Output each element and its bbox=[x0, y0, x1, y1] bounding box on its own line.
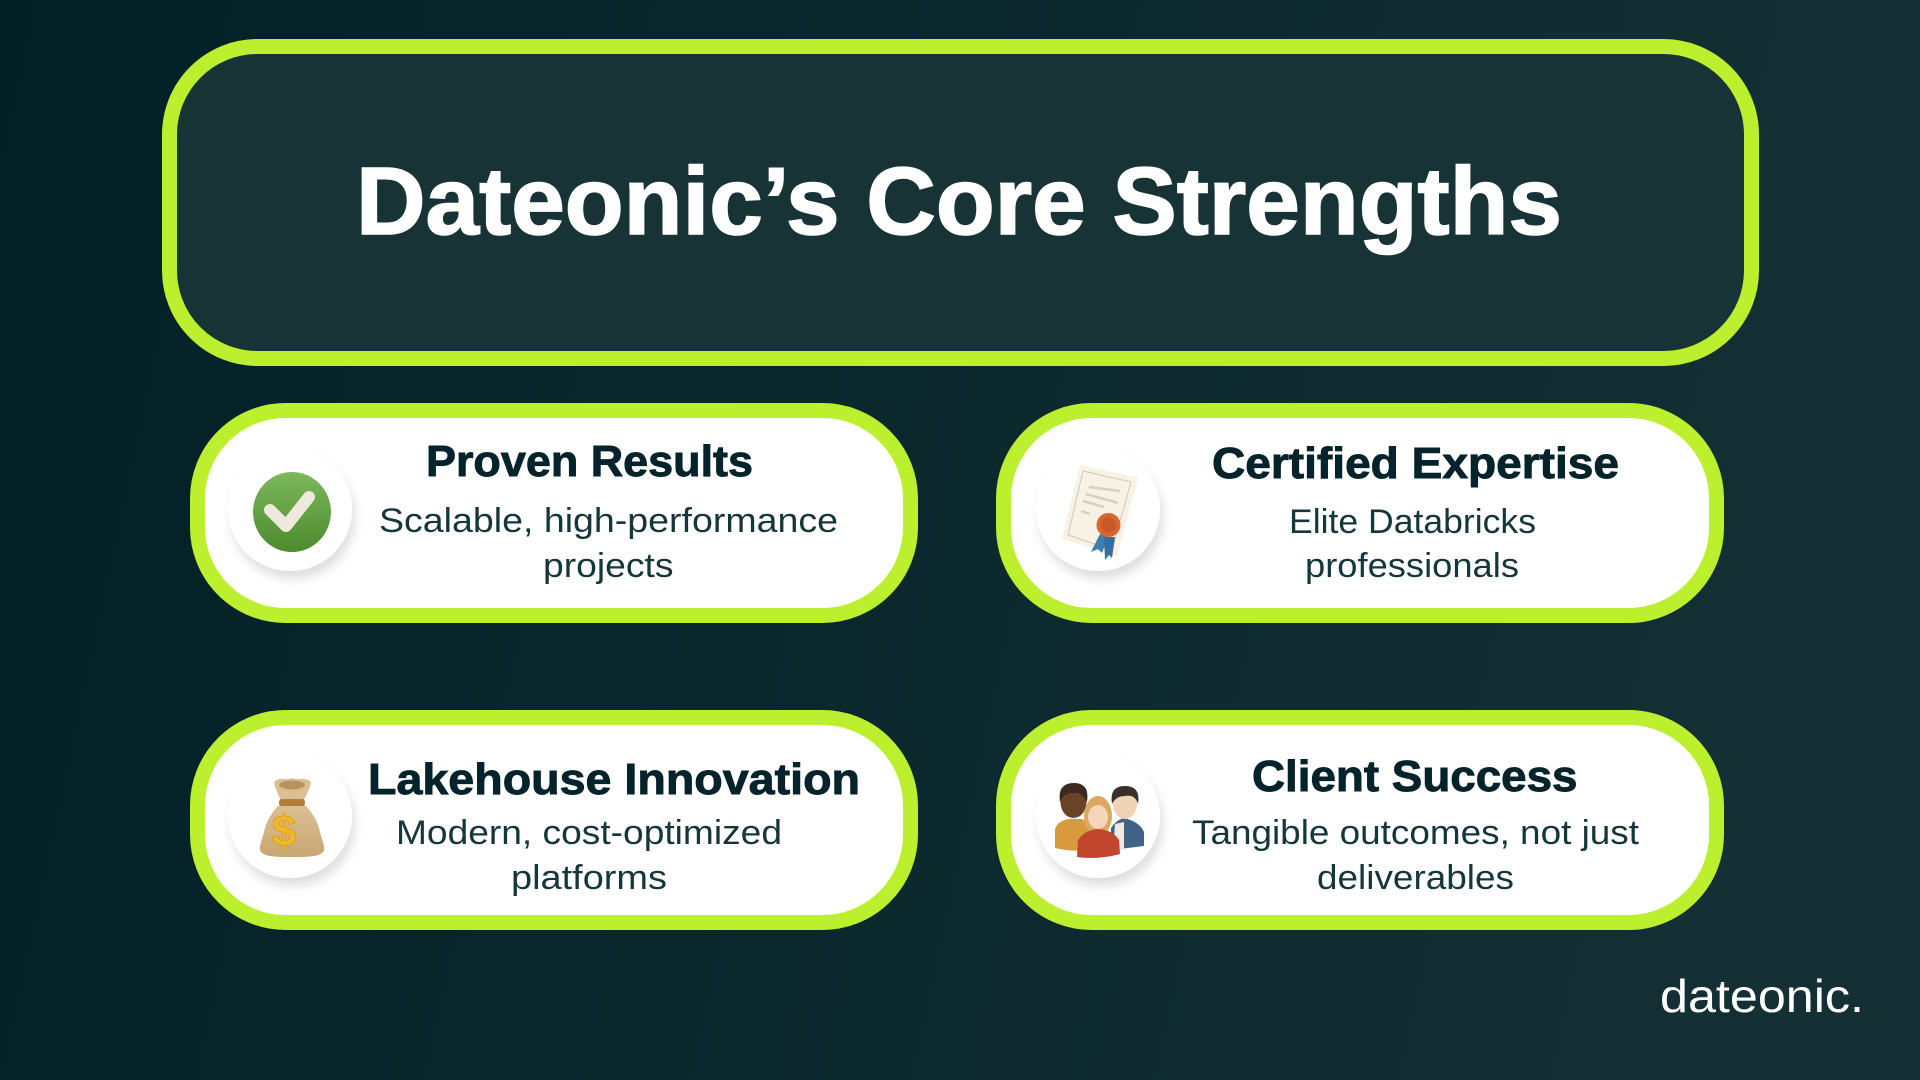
heading: proven results: Proven Results bbox=[426, 437, 753, 486]
panel: proven results bbox=[198, 410, 910, 616]
description: certified expertise: professionals bbox=[1305, 547, 1519, 585]
icon: money bag bbox=[228, 754, 352, 878]
dollar sign: $ bbox=[272, 807, 296, 856]
title: Dateonic’s Core Strengths bbox=[356, 148, 1562, 255]
title panel bbox=[170, 46, 1752, 358]
description: client success: deliverables bbox=[1317, 859, 1514, 897]
heading: lakehouse innovation: Lakehouse Innovation bbox=[368, 755, 860, 804]
panel: client success bbox=[1004, 718, 1716, 922]
icon: green check mark bbox=[228, 447, 352, 571]
icon: certificate with ribbon bbox=[1036, 447, 1160, 571]
panel: certified expertise bbox=[1004, 410, 1716, 616]
description: lakehouse innovation: Modern, cost-optimized bbox=[396, 814, 782, 852]
description: proven results: projects bbox=[543, 547, 674, 585]
heading: client success: Client Success bbox=[1252, 752, 1578, 801]
description: client success: Tangible outcomes, not just bbox=[1192, 814, 1640, 852]
panel: lakehouse innovation bbox=[198, 718, 910, 922]
description: lakehouse innovation: platforms bbox=[511, 859, 667, 897]
icon: three people bbox=[1036, 754, 1160, 878]
description: certified expertise: Elite Databricks bbox=[1289, 503, 1536, 541]
heading: certified expertise: Certified Expertise bbox=[1212, 439, 1619, 488]
description: proven results: Scalable, high-performance bbox=[379, 502, 838, 540]
logo wordmark: dateonic. bbox=[1660, 970, 1864, 1022]
